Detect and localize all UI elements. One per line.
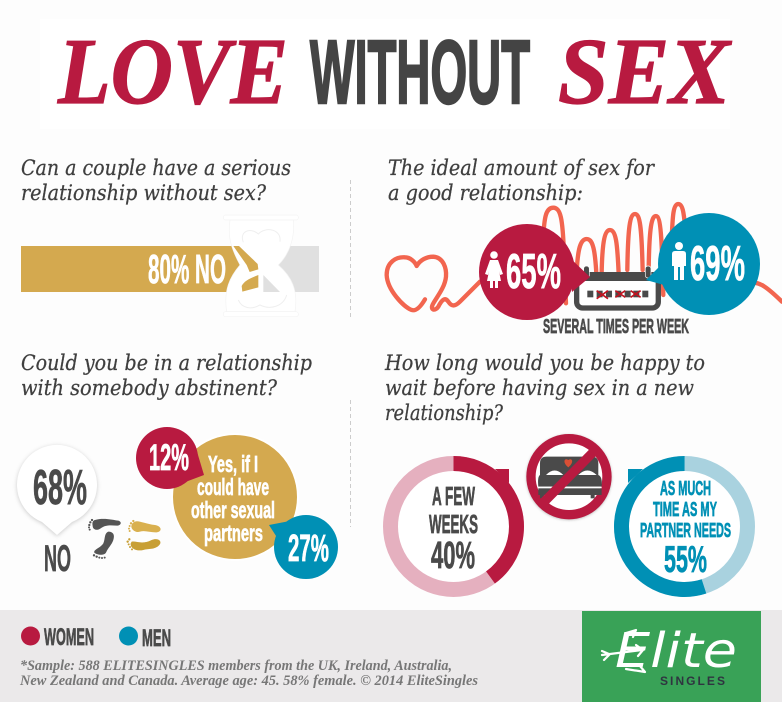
progress bar: 80% NO <box>148 246 226 292</box>
icon: footprints <box>88 519 161 559</box>
donut chart: women 40%: A FEW <box>432 481 475 511</box>
footer <box>0 610 782 702</box>
heading: question 2: The ideal amount of sex for <box>388 156 656 180</box>
icon: woman <box>485 251 503 288</box>
heading: question 1: relationship without sex? <box>21 181 267 205</box>
panel: serious relationship without sex <box>21 156 319 317</box>
callout: women 65%: 65% <box>506 245 561 299</box>
legend: men: MEN <box>142 625 171 652</box>
logo: EliteSingles: SINGLES <box>660 674 725 688</box>
callout: women 65% <box>479 224 590 320</box>
callout: 68% no <box>17 445 97 579</box>
heading: question 1: Can a couple have a serious <box>21 156 291 180</box>
title <box>57 20 732 124</box>
heartbeat line <box>387 204 782 310</box>
callout: 68% no: 68% <box>33 461 87 515</box>
heading: question 4 <box>384 351 705 425</box>
donut chart: women 40%: 40% <box>431 535 475 577</box>
heading: question 2: a good relationship: <box>388 181 583 205</box>
callout: yes if other partners: other sexual <box>191 497 275 523</box>
legend: men <box>119 625 171 652</box>
callout: men 27% <box>269 515 338 579</box>
logo: EliteSingles <box>582 611 761 702</box>
heading: question 4: How long would you be happy to <box>384 351 705 375</box>
panel: relationship with somebody abstinent <box>17 351 338 579</box>
logo: EliteSingles: Elite <box>615 623 737 679</box>
panel: ideal amount of sex <box>387 156 782 338</box>
donut chart: men 55%: TIME AS MY <box>653 499 717 521</box>
callout: yes if other partners <box>172 434 298 560</box>
callout: men 69% <box>646 213 760 315</box>
sample note <box>19 658 478 689</box>
icon: no bed <box>531 439 607 515</box>
callout: yes if other partners: could have <box>197 474 269 500</box>
title: SEX <box>558 20 732 124</box>
sample note: New Zealand and Canada. Average age: 45. 58% female. © 2014 EliteSingles <box>19 673 478 689</box>
donut chart: men 55%: 55% <box>664 539 707 580</box>
icon: hourglass with hearts <box>223 215 298 317</box>
callout: women 12% <box>136 427 204 489</box>
legend: women: WOMEN <box>44 624 94 651</box>
callout: yes if other partners: Yes, if I <box>208 451 258 477</box>
progress bar <box>21 246 319 292</box>
heading: question 3: Could you be in a relationship <box>21 351 312 375</box>
heading: question 3: with somebody abstinent? <box>21 376 278 400</box>
heading: question 2 <box>388 156 656 205</box>
callout: 68% no: NO <box>44 538 71 579</box>
donut chart: men 55%: AS MUCH <box>660 478 711 500</box>
legend: women <box>21 624 94 651</box>
heading: question 4: relationship? <box>385 401 504 425</box>
callout: yes if other partners: partners <box>204 520 263 546</box>
panel: waiting before sex <box>384 351 764 606</box>
title: WITHOUT <box>310 23 530 123</box>
heading: question 3 <box>21 351 312 400</box>
donut chart: women 40% <box>390 464 516 590</box>
icon: man <box>672 242 686 280</box>
callout: women 12%: 12% <box>149 437 189 478</box>
callout: men 27%: 27% <box>288 528 329 570</box>
sample note: *Sample: 588 ELITESINGLES members from the UK, Ireland, Australia, <box>20 658 452 674</box>
donut chart: men 55% <box>605 447 764 606</box>
calendar icon <box>574 266 661 308</box>
heading: question 4: wait before having sex in a new <box>385 376 694 400</box>
title: LOVE <box>57 20 288 124</box>
heading: question 1 <box>21 156 291 205</box>
donut chart: women 40%: WEEKS <box>429 509 478 539</box>
